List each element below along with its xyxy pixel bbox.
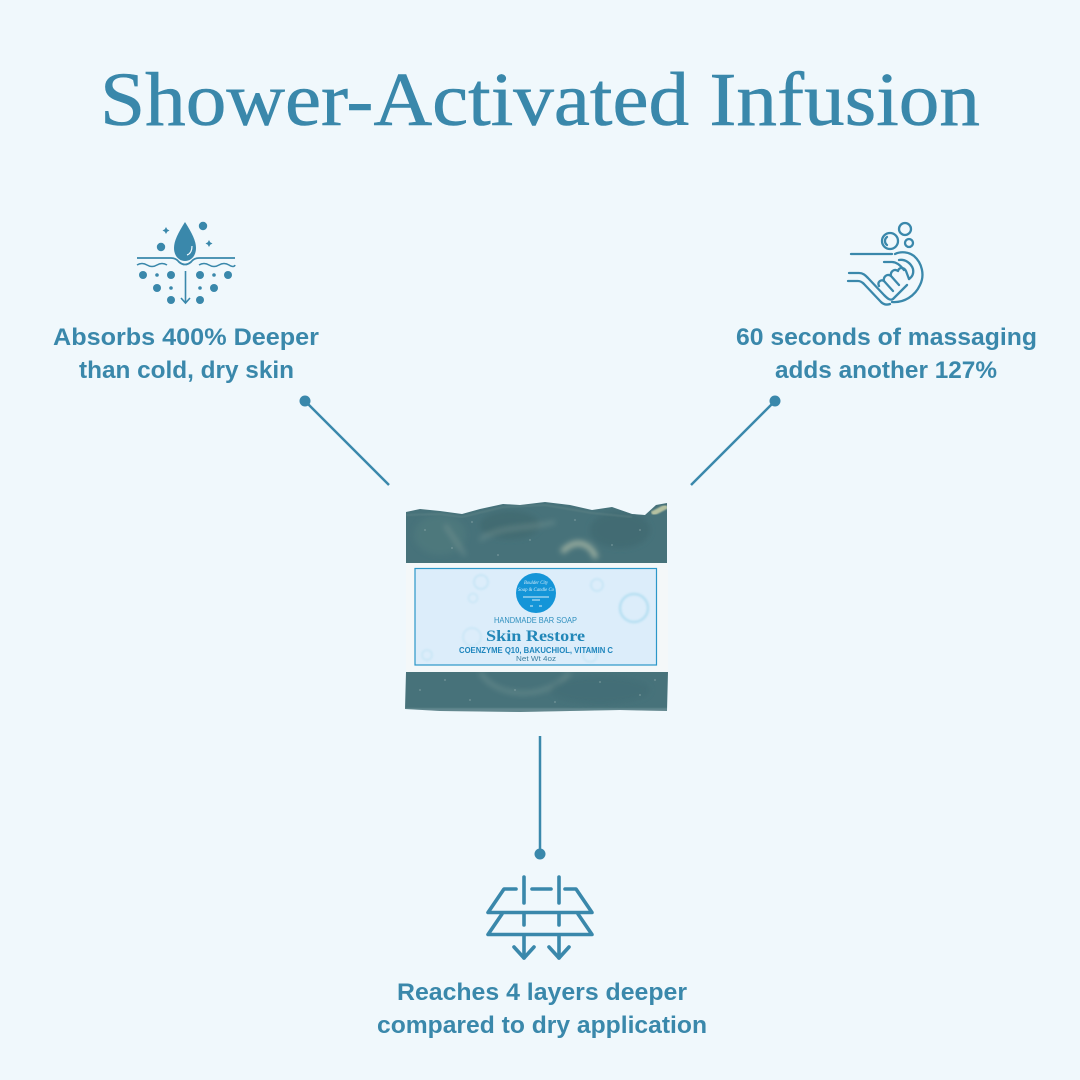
text: reaches 4 layers deeper xyxy=(377,979,707,1039)
arrow: bottom connector xyxy=(534,736,546,860)
icon: hand massaging with bubbles xyxy=(848,223,922,305)
text: 60 seconds of massaging: adds another 127% xyxy=(775,357,997,384)
icon: skin layers with down arrows xyxy=(488,877,592,958)
text: reaches 4 layers deeper: compared to dry application xyxy=(377,1012,707,1039)
text: 60 seconds of massaging xyxy=(736,324,1037,384)
soap label: HANDMADE BAR SOAP xyxy=(494,615,577,625)
soap bar product xyxy=(400,498,675,716)
soap logo badge: Soap & Candle Co xyxy=(518,587,554,593)
soap label: COENZYME Q10, BAKUCHIOL, VITAMIN C xyxy=(459,646,613,655)
text: absorbs 400% deeper xyxy=(53,324,319,384)
soap logo badge: Boulder City xyxy=(524,580,548,586)
icon: water drop absorbing into skin xyxy=(137,222,235,304)
soap label xyxy=(415,568,656,665)
text: 60 seconds of massaging: 60 seconds of massaging xyxy=(736,324,1037,351)
title: Shower-Activated Infusion xyxy=(100,58,980,142)
arrow: left connector xyxy=(300,396,389,485)
soap label: Skin Restore xyxy=(486,628,585,645)
soap label: Net Wt 4oz xyxy=(516,654,556,663)
arrow: right connector xyxy=(691,396,780,485)
soap paper band xyxy=(406,563,668,672)
soap logo badge xyxy=(516,573,556,613)
text: reaches 4 layers deeper: Reaches 4 layers deeper xyxy=(397,979,687,1006)
text: absorbs 400% deeper: than cold, dry skin xyxy=(79,357,294,384)
text: absorbs 400% deeper: Absorbs 400% Deeper xyxy=(53,324,319,351)
